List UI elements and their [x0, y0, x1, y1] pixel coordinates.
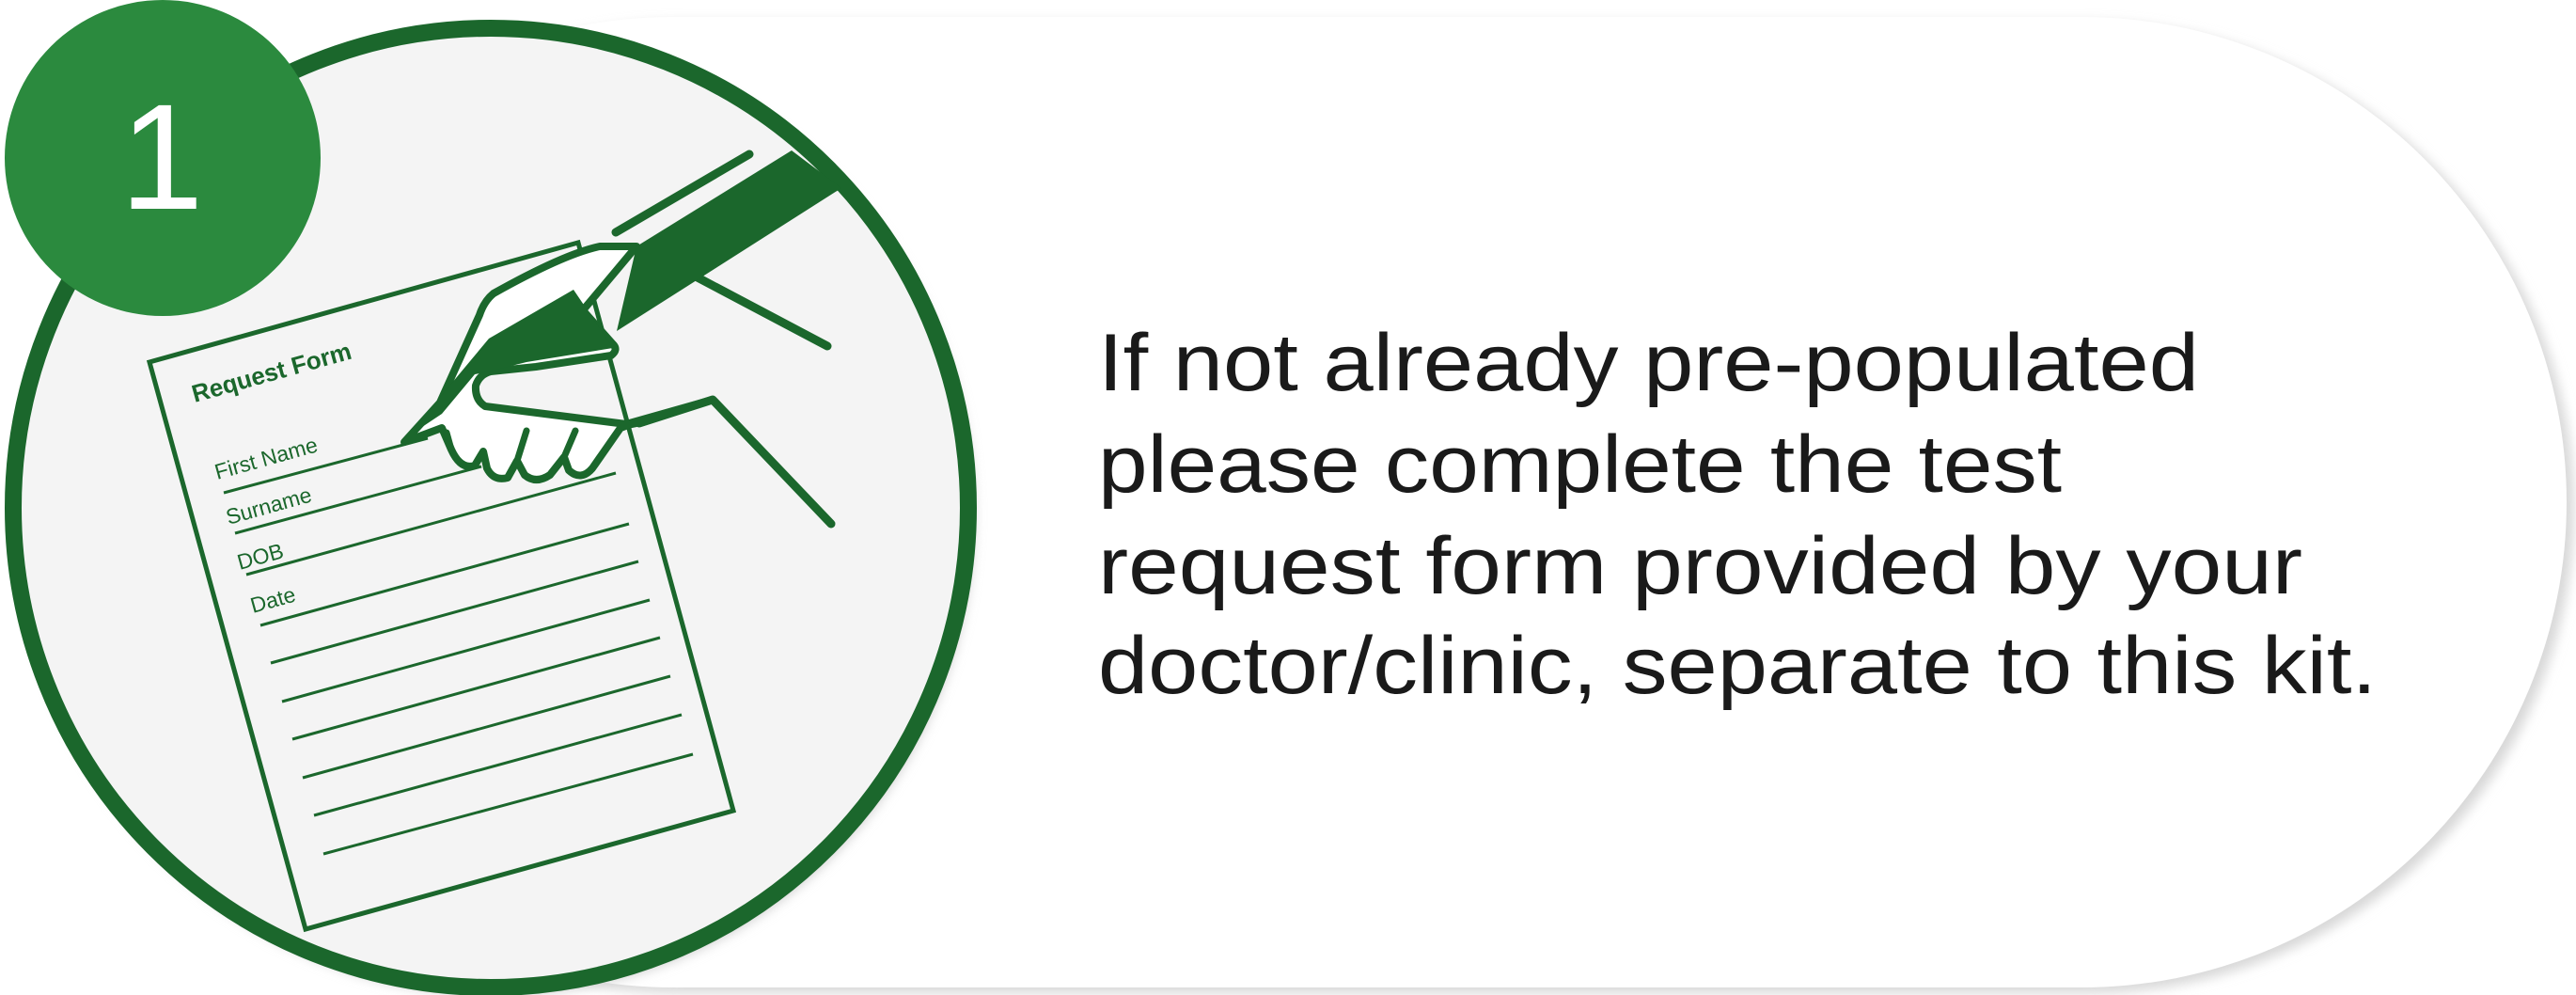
- text block: instruction: please complete the test: [1098, 419, 2062, 510]
- form field labels: DOB: [234, 538, 286, 575]
- icon: hand writing with pen: [404, 150, 841, 524]
- hand: [404, 246, 713, 480]
- form field labels: Surname: [223, 482, 314, 529]
- form field labels: [212, 433, 321, 618]
- step number badge: [5, 0, 321, 316]
- pen body: [617, 150, 841, 331]
- pen nib: [414, 290, 613, 433]
- text block: instruction: [1098, 318, 2377, 711]
- icon: request form paper: [149, 243, 733, 929]
- form field labels: Date: [247, 582, 298, 618]
- text block: instruction: doctor/clinic, separate to this kit.: [1098, 621, 2377, 711]
- form field labels: First Name: [212, 433, 321, 484]
- text block: instruction: request form provided by your: [1098, 521, 2302, 611]
- illustration circle: [13, 28, 974, 995]
- pen clip: [616, 154, 749, 232]
- step number badge: 1: [120, 72, 203, 241]
- motion lines: [696, 276, 827, 346]
- form title: Request Form: [189, 337, 354, 408]
- text block: instruction: If not already pre-populated: [1098, 318, 2199, 408]
